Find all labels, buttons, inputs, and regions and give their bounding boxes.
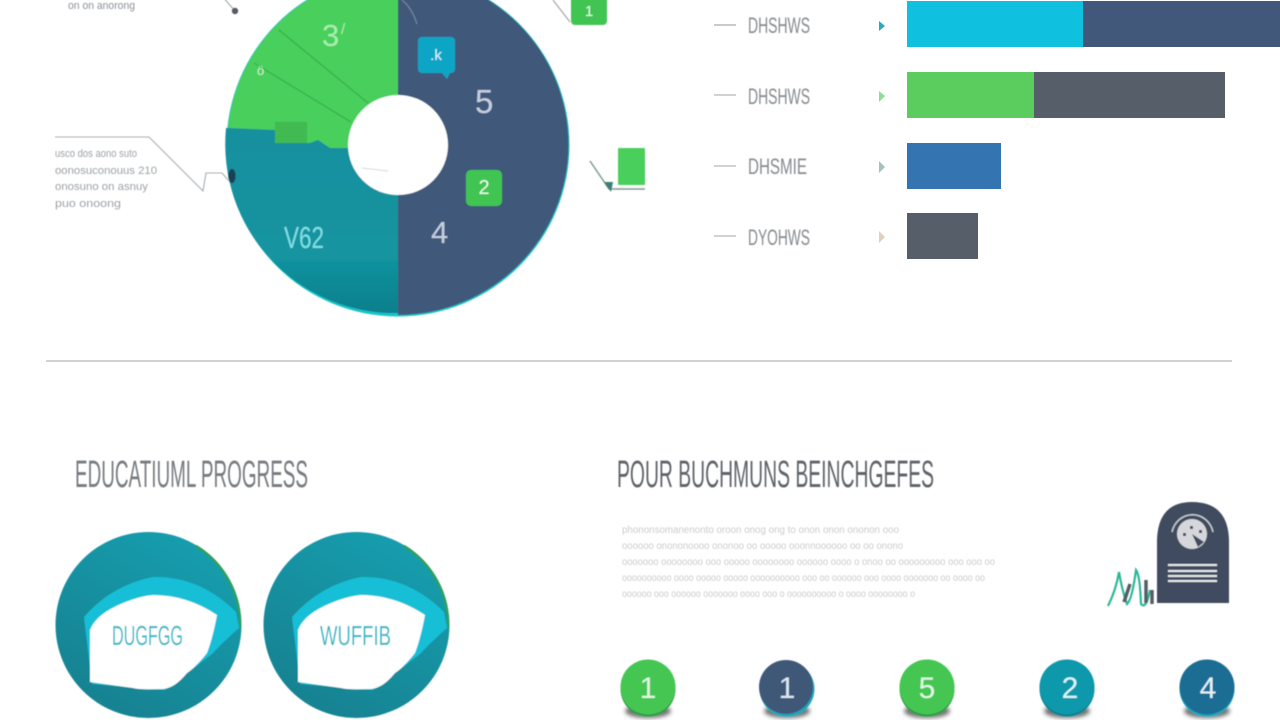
small dark bars xyxy=(1124,580,1152,604)
green edge xyxy=(196,546,240,628)
callout text: oonosuconouus 210 xyxy=(55,165,157,177)
badge 2 xyxy=(759,660,814,718)
label: V62: V62 xyxy=(284,220,324,255)
gauge arc xyxy=(1172,515,1213,532)
panel label: DUGFGG xyxy=(112,620,183,651)
donut hole xyxy=(348,95,448,195)
label: 5: 5 xyxy=(475,83,493,120)
donut chart xyxy=(225,0,570,316)
green segment dark patch xyxy=(275,122,307,143)
leader line xyxy=(553,0,570,22)
badge 5: 4 xyxy=(1200,672,1216,705)
row 4 xyxy=(714,213,978,259)
donut hole mark xyxy=(362,168,388,171)
text lines xyxy=(1168,565,1217,581)
inner white panel xyxy=(90,595,217,689)
callout text xyxy=(55,148,157,210)
row 2 xyxy=(714,72,1225,118)
gauge dial xyxy=(1177,519,1207,549)
segment: navy xyxy=(398,0,568,315)
icon: cyan tag xyxy=(418,37,455,79)
heading: four benchmarks: POUR BUCHMUNS BEINCHGEFES xyxy=(617,454,934,496)
row 2: DHSHWS xyxy=(748,84,810,109)
badge 3: 5 xyxy=(919,672,935,705)
cyan band xyxy=(84,577,239,690)
green segment small icon: ö xyxy=(257,63,264,78)
progress circle 1 xyxy=(56,532,242,718)
section divider xyxy=(46,360,1232,362)
outer ring xyxy=(264,532,450,718)
label: 3: 3 xyxy=(322,18,339,53)
badge 4: 2 xyxy=(1062,672,1078,705)
callout: left xyxy=(55,137,236,210)
icon: report tablet with gauge xyxy=(1108,502,1229,606)
outer ring xyxy=(56,532,242,718)
gauge details xyxy=(1183,526,1204,547)
badge 2: 1 xyxy=(779,672,795,705)
row 3 xyxy=(714,143,1001,189)
callout: right xyxy=(590,148,645,192)
row 4: DYOHWS xyxy=(748,225,810,250)
body paragraph: phononsomanenonto oroon onog ong to onon onon ononon ooo xyxy=(622,525,899,536)
tablet body xyxy=(1157,502,1229,603)
leader line xyxy=(55,137,229,191)
segment: teal xyxy=(225,128,398,313)
badge 1 xyxy=(620,660,676,718)
row 3: DHSMIE xyxy=(748,154,807,179)
badge 3 xyxy=(900,660,954,718)
label: apostrophe: / xyxy=(341,21,346,38)
body paragraph xyxy=(622,525,995,600)
text: EDUCATIUML PROGRESS xyxy=(75,454,308,496)
icon: green tag xyxy=(466,170,502,206)
callout: upper left xyxy=(68,0,238,14)
body paragraph: oooooooooo oooo ooooo ooooo oooooooooo ooo oo oooooo ooo oooo ooooooo oo oooo oo xyxy=(622,573,985,584)
cyan band xyxy=(292,577,447,690)
panel label: WUFFIB xyxy=(320,620,391,651)
leader line and dot xyxy=(222,0,238,14)
callout text: puo onoong xyxy=(55,198,121,210)
donut rim xyxy=(226,0,570,316)
leader dot xyxy=(228,169,236,183)
callout text: onosuno on asnuy xyxy=(55,181,149,193)
green edge xyxy=(404,546,448,628)
inner white panel xyxy=(298,595,425,689)
segment: green xyxy=(228,0,398,152)
green tag xyxy=(618,148,645,185)
numbered badges xyxy=(620,660,1234,718)
leader line xyxy=(590,161,645,189)
row 1 xyxy=(714,1,1280,47)
tag base xyxy=(604,182,613,192)
body paragraph: oooooo onononoooo ononoo oo ooooo ooonnoooooo oo oo onono xyxy=(622,541,903,552)
icon: cyan tag: .k xyxy=(430,47,442,64)
badge 4 xyxy=(1040,660,1094,718)
badge 1: 1 xyxy=(640,672,656,705)
label: 4: 4 xyxy=(431,215,448,250)
body paragraph: ooooooo oooooooo ooo ooooo oooooooo oooooo oooo o onoo oo ooooooooo ooo ooo oo xyxy=(622,557,995,568)
callout: top right xyxy=(553,0,607,25)
callout text: on on anorong xyxy=(68,0,135,12)
tag number: 1 xyxy=(585,3,593,20)
progress circle 2 xyxy=(264,532,450,718)
green tag xyxy=(571,0,607,25)
badge 5 xyxy=(1180,660,1234,718)
green segment fold lines xyxy=(254,30,368,122)
bar chart xyxy=(714,1,1280,259)
row 1: DHSHWS xyxy=(748,13,810,38)
squiggle chart xyxy=(1108,570,1150,606)
top seam mark xyxy=(402,0,417,24)
icon: green tag: 2 xyxy=(478,177,490,199)
callout text: usco dos aono suto xyxy=(55,148,137,160)
body paragraph: oooooo ooo oooooo ooooooo oooo ooo o oooooooooo o oooo oooooooo o xyxy=(622,589,915,600)
